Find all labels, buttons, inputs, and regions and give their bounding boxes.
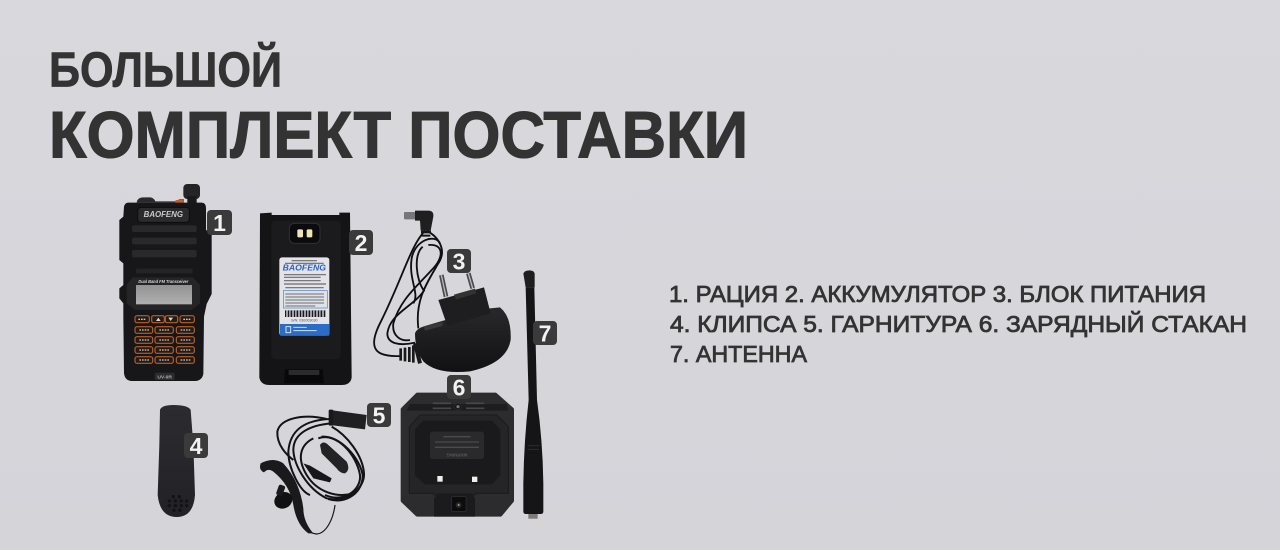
list line 1: 1. РАЦИЯ 2. АККУМУЛЯТОР 3. БЛОК ПИТАНИЯ <box>669 281 1206 307</box>
badge 6 <box>447 374 471 400</box>
icon: battery: S/N: 030003030 <box>291 319 318 323</box>
badge 4 <box>184 433 208 459</box>
icon: belt clip <box>158 405 195 517</box>
badge 1 <box>207 210 232 236</box>
badge 4: 4 <box>190 433 203 459</box>
badge 7 <box>533 320 557 346</box>
badge 2 <box>349 230 373 256</box>
icon: radio <box>119 184 212 381</box>
badge 3: 3 <box>453 248 465 274</box>
icon: battery <box>259 213 352 385</box>
badge 1: 1 <box>213 210 226 236</box>
icon: radio: UV-9R <box>157 374 172 380</box>
text block: contents list <box>669 281 1247 367</box>
badge 2: 2 <box>355 230 367 256</box>
badge 7: 7 <box>539 320 551 346</box>
badge 5: 5 <box>373 402 386 428</box>
list line 3: 7. АНТЕННА <box>670 341 807 367</box>
icon: radio: BAOFENG <box>144 210 183 219</box>
heading line 1: БОЛЬШОЙ <box>49 42 282 98</box>
badge 5 <box>367 402 391 428</box>
icon: headset <box>260 410 367 534</box>
title <box>49 42 748 172</box>
icon: power adapter <box>374 211 511 372</box>
icon: antenna <box>523 270 543 519</box>
icon: radio: Dual Band FM Transceiver <box>138 279 189 284</box>
badge 3 <box>447 248 471 274</box>
heading line 2: КОМПЛЕКТ ПОСТАВКИ <box>49 98 748 172</box>
list line 2: 4. КЛИПСА 5. ГАРНИТУРА 6. ЗАРЯДНЫЙ СТАКАН <box>670 310 1247 337</box>
icon: charging cradle: WARNING <box>446 452 467 457</box>
icon: battery: BAOFENG <box>283 264 326 273</box>
badge 6: 6 <box>453 374 465 400</box>
icon: charging cradle <box>403 395 512 517</box>
